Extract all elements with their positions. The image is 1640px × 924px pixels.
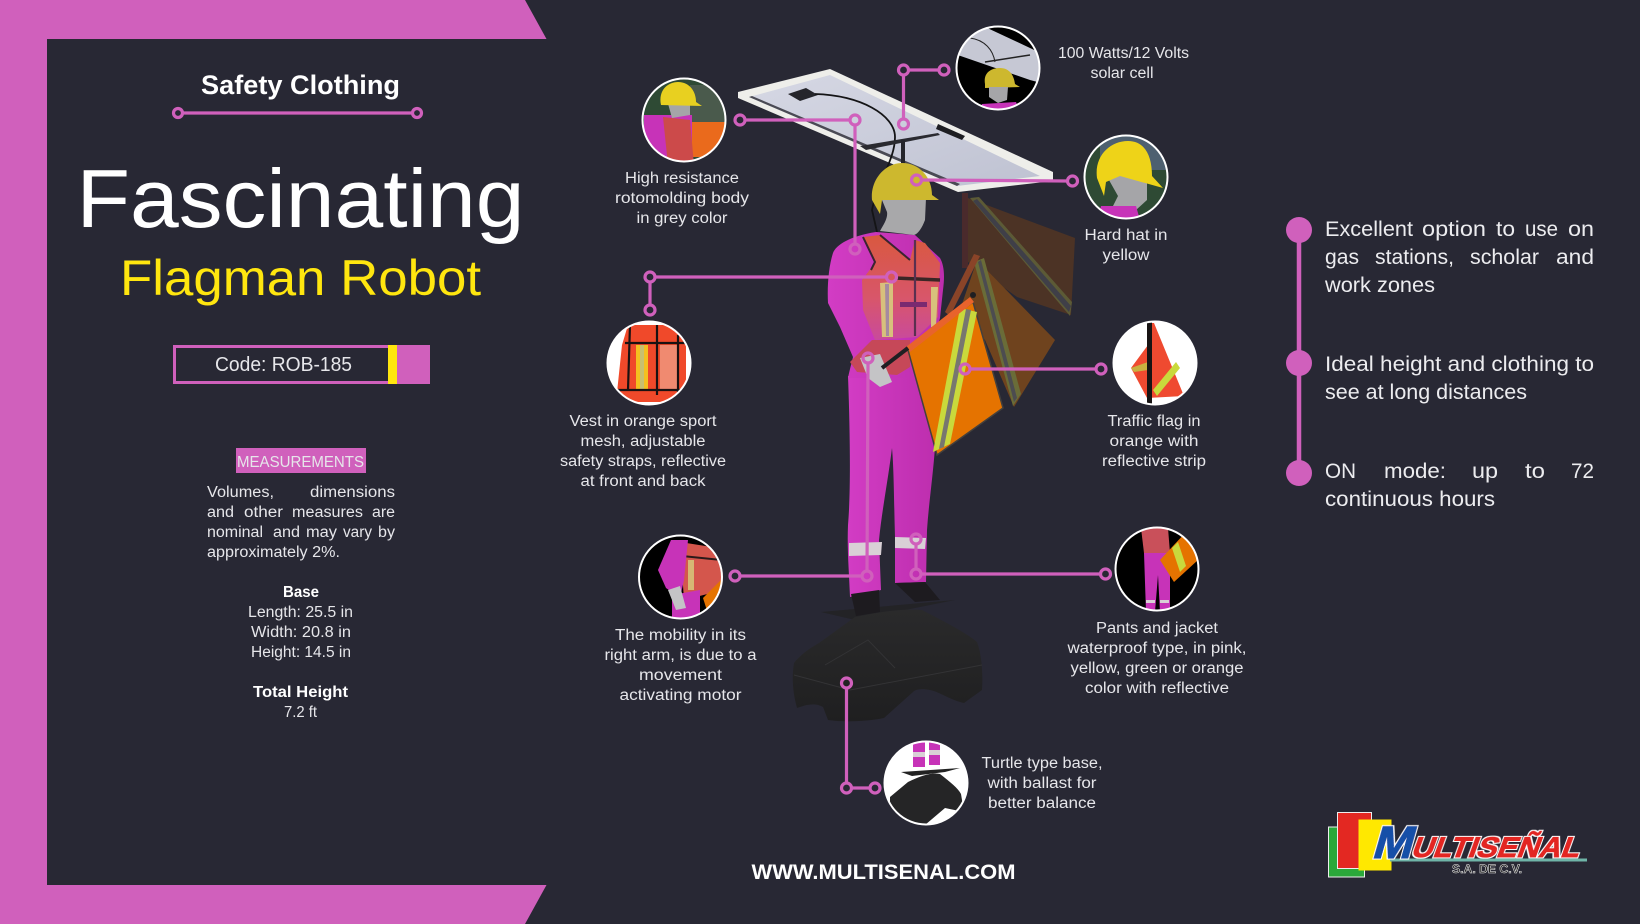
label: turtle base: with ballast for — [986, 775, 1096, 792]
timeline — [1286, 217, 1312, 486]
logo: Multiseñal: ULTISEÑAL — [1408, 831, 1588, 864]
feature: use locations: gas — [1325, 246, 1359, 269]
base dimensions: Height: 14.5 in — [251, 644, 351, 661]
panel: key features timeline — [1286, 217, 1594, 511]
feature: on mode: to — [1525, 460, 1545, 483]
icon: turtle base photo — [884, 740, 968, 826]
icon: vest photo — [606, 320, 692, 406]
connector: flag — [960, 364, 1106, 374]
logo: Multiseñal: M — [1368, 817, 1423, 868]
label: rotomolding body: High resistance — [625, 170, 739, 187]
icon: traffic flag photo — [1112, 320, 1198, 406]
feature: use locations — [1324, 218, 1594, 297]
title: Fascinating: Fascinating — [76, 152, 524, 245]
measurements note: vary — [343, 524, 372, 541]
feature: height and clothing — [1325, 353, 1594, 404]
heading divider — [174, 108, 422, 118]
total height: 7.2 ft — [284, 704, 318, 721]
label: turtle base — [982, 755, 1102, 812]
label: arm mobility: activating motor — [620, 687, 742, 704]
label: rotomolding body — [615, 170, 749, 227]
label: arm mobility: movement — [639, 667, 723, 684]
glove — [860, 354, 892, 387]
base dimensions: Length: 25.5 in — [248, 604, 353, 621]
feature: height and clothing: Ideal height and clothing to — [1325, 353, 1594, 376]
feature: use locations: to — [1496, 218, 1515, 241]
measurements note: and — [207, 504, 234, 521]
head — [880, 198, 926, 235]
icon: pants photo — [1114, 526, 1200, 612]
reflective bands — [849, 537, 926, 556]
connector: vest — [645, 272, 896, 315]
feature: on mode: ON — [1325, 460, 1356, 483]
website: WWW.MULTISENAL.COM — [752, 861, 1016, 884]
measurements tag: MEASUREMENTS — [237, 454, 364, 471]
connector: rotomolding body — [735, 115, 860, 254]
panel: left title — [76, 70, 524, 721]
boots and plate — [821, 582, 955, 620]
label: vest: mesh, adjustable — [580, 433, 706, 450]
feature: on mode: continuous hours — [1325, 488, 1495, 511]
feature: on mode — [1325, 460, 1594, 511]
code box — [174, 345, 428, 384]
heading: Safety Clothing: Safety Clothing — [201, 70, 400, 100]
ghost flags — [945, 193, 1075, 407]
label: hard hat: Hard hat in — [1084, 227, 1168, 244]
label: hard hat — [1084, 227, 1168, 264]
label: pants and jacket: Pants and jacket — [1096, 620, 1219, 637]
feature: use locations: and — [1556, 246, 1594, 269]
pants — [848, 374, 936, 597]
label: solar cell — [1058, 45, 1189, 82]
label: arm mobility: right arm, is due to a — [604, 647, 757, 664]
connector: solar cell — [898, 65, 949, 129]
label: solar cell: solar cell — [1090, 65, 1154, 82]
label: pants and jacket — [1066, 620, 1246, 697]
measurements note: Volumes, — [207, 484, 274, 501]
feature: on mode: 72 — [1571, 460, 1594, 483]
feature: use locations: work zones — [1324, 274, 1435, 297]
icon: hard hat photo — [1084, 134, 1168, 220]
label: arm mobility — [604, 627, 757, 704]
label: pants and jacket: waterproof type, in pink, — [1066, 640, 1246, 657]
base dimensions — [248, 584, 353, 661]
label: hard hat: yellow — [1102, 247, 1150, 264]
solar panel — [738, 69, 1053, 232]
logo: Multiseñal — [1328, 812, 1588, 877]
label: traffic flag — [1102, 413, 1206, 470]
label: turtle base: better balance — [988, 795, 1096, 812]
measurements note: dimensions — [310, 484, 395, 501]
label: turtle base: Turtle type base, — [982, 755, 1102, 772]
icon: solar cell photo — [956, 26, 1040, 110]
label: rotomolding body: in grey color — [636, 210, 728, 227]
icon: arm mobility photo — [638, 534, 723, 620]
label: traffic flag: reflective strip — [1102, 453, 1206, 470]
measurements note: may — [306, 524, 337, 541]
connector: hard hat — [912, 175, 1078, 186]
feature: on mode: up — [1472, 460, 1498, 483]
feature: use locations: scholar — [1470, 246, 1539, 269]
turtle base — [793, 609, 982, 721]
label: traffic flag: orange with — [1110, 433, 1198, 450]
connector: arm mobility — [730, 353, 873, 581]
label: arm mobility: The mobility in its — [615, 627, 746, 644]
robot illustration — [738, 69, 1075, 721]
label: solar cell: 100 Watts/12 Volts — [1058, 45, 1189, 62]
measurements note: are — [372, 504, 395, 521]
connector: turtle base — [842, 678, 880, 793]
feature: height and clothing: see at long distances — [1325, 381, 1527, 404]
measurements note: measures — [292, 504, 363, 521]
measurements note — [207, 484, 395, 561]
logo: Multiseñal: S.A. DE C.V. — [1452, 864, 1522, 876]
vest — [850, 235, 940, 375]
label: vest: at front and back — [580, 473, 706, 490]
measurements note: approximately 2%. — [207, 544, 340, 561]
label: pants and jacket: yellow, green or orange — [1070, 660, 1244, 677]
feature: use locations: on — [1568, 218, 1594, 241]
label: vest — [560, 413, 726, 490]
title: Flagman Robot: Flagman Robot — [120, 250, 481, 306]
label: pants and jacket: color with reflective — [1085, 680, 1229, 697]
hard hat — [872, 163, 939, 214]
main flag — [882, 292, 1003, 455]
measurements note: and — [273, 524, 300, 541]
feature: use locations: Excellent — [1325, 218, 1413, 241]
feature: use locations: option — [1422, 218, 1486, 241]
jacket — [828, 232, 944, 378]
measurements note: other — [244, 504, 283, 521]
icon: rotomolding body photo — [642, 78, 726, 162]
pink frame — [0, 0, 546, 924]
label: vest: Vest in orange sport — [570, 413, 717, 430]
feature: use locations: use — [1525, 218, 1558, 241]
measurements note: by — [378, 524, 395, 541]
measurements tag — [236, 448, 366, 473]
label: vest: safety straps, reflective — [560, 453, 726, 470]
connector: pants — [911, 534, 1110, 579]
feature: on mode: mode: — [1384, 460, 1446, 483]
code box: Code: ROB-185 — [215, 354, 352, 376]
base dimensions: Width: 20.8 in — [251, 624, 351, 641]
measurements note: nominal — [207, 524, 263, 541]
total height — [253, 684, 348, 721]
label: rotomolding body: rotomolding body — [615, 190, 749, 207]
feature: use locations: stations, — [1375, 246, 1454, 269]
base dimensions: Base — [283, 584, 319, 601]
label: traffic flag: Traffic flag in — [1108, 413, 1200, 430]
total height: Total Height — [253, 684, 348, 701]
